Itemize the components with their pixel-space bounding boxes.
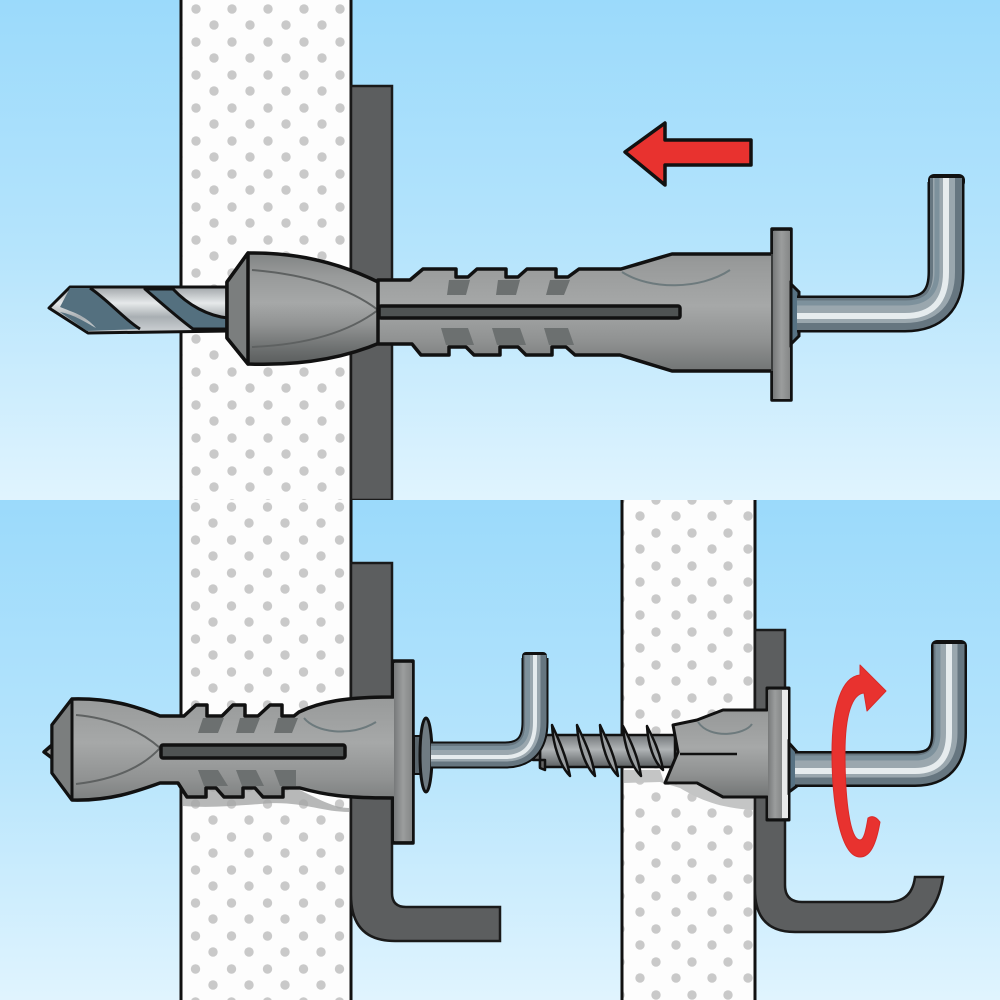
wall section: [181, 0, 351, 500]
screw: [533, 725, 675, 776]
shadow on wall: [624, 770, 753, 810]
arrow: rotation: [832, 665, 886, 857]
hook bracket behind wall: [351, 86, 392, 500]
wall plug inserted: [44, 661, 413, 843]
panel: step 1 drilling: [0, 0, 1000, 500]
wall section: [622, 500, 755, 1000]
wall plug ribbed body and flange: [378, 229, 791, 400]
hook fixture: [431, 652, 547, 757]
panel: step 3 screw fastening: [500, 500, 1000, 1000]
shadow on wall: [183, 790, 349, 812]
washer: [414, 718, 432, 792]
hook bracket: [755, 630, 943, 932]
hook fixture: [789, 640, 967, 792]
arrow: push direction: [625, 123, 751, 185]
drill bit: [49, 287, 230, 333]
panel: step 2 insertion: [0, 500, 547, 1000]
hook bracket: [351, 563, 500, 941]
hook fixture: [791, 174, 965, 344]
wall plug expanded nose: [227, 253, 382, 364]
dowel collapsed: [665, 688, 789, 820]
wall section: [181, 500, 351, 1000]
